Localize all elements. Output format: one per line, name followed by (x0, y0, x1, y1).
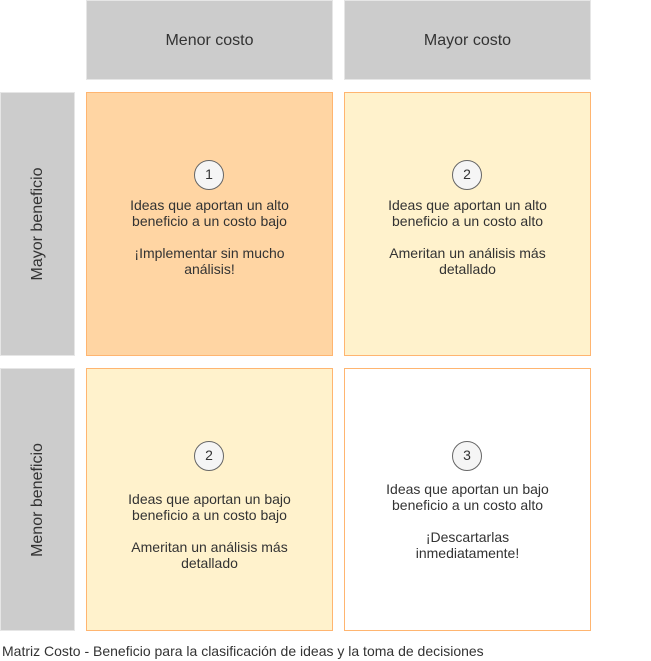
panel text 2: beneficio a un costo alto (392, 213, 543, 229)
panel text 2: Ideas que aportan un alto (388, 197, 547, 213)
panel text 3 (386, 481, 549, 561)
number badge 2: 2 (463, 166, 471, 182)
row header: Menor beneficio: Menor beneficio (29, 443, 46, 557)
panel text 2: Ameritan un análisis más (389, 245, 546, 261)
column header: Mayor costo: Mayor costo (424, 32, 511, 49)
panel text 2 (388, 197, 547, 277)
row header: Menor beneficio (0, 368, 75, 631)
panel: high cost, high benefit (344, 92, 591, 356)
panel text 3: ¡Descartarlas (426, 529, 509, 545)
panel text 3: inmediatamente! (416, 545, 519, 561)
panel text 1: beneficio a un costo bajo (132, 213, 287, 229)
number badge 3: 3 (463, 447, 471, 463)
row header: Mayor beneficio: Mayor beneficio (29, 168, 46, 280)
panel text 3: Ideas que aportan un bajo (386, 481, 549, 497)
panel text 3: beneficio a un costo alto (392, 497, 543, 513)
panel: low cost, low benefit (86, 368, 333, 631)
column header: Menor costo: Menor costo (165, 32, 254, 49)
number badge 2 (452, 160, 482, 190)
number badge 1: 1 (205, 166, 213, 182)
row header: Mayor beneficio (0, 92, 75, 356)
panel: low cost, high benefit (86, 92, 333, 356)
number badge 2: 2 (205, 447, 213, 463)
panel text 2: Ameritan un análisis más (131, 539, 288, 555)
number badge 1 (194, 160, 224, 190)
panel text 2: beneficio a un costo bajo (132, 507, 287, 523)
panel text 2: Ideas que aportan un bajo (128, 491, 291, 507)
panel text 2: detallado (181, 555, 238, 571)
panel text 1: Ideas que aportan un alto (130, 197, 289, 213)
column header: Menor costo (86, 0, 333, 80)
panel text 1: análisis! (184, 261, 235, 277)
caption: Matriz Costo - Beneficio para la clasificación de ideas y la toma de decisiones (2, 643, 484, 659)
panel text 1: ¡Implementar sin mucho (134, 245, 285, 261)
column header: Mayor costo (344, 0, 591, 80)
number badge 2 (194, 441, 224, 471)
panel text 2: detallado (439, 261, 496, 277)
panel: high cost, low benefit (344, 368, 591, 631)
panel text 2 (128, 491, 291, 571)
number badge 3 (452, 441, 482, 471)
panel text 1 (130, 197, 289, 277)
